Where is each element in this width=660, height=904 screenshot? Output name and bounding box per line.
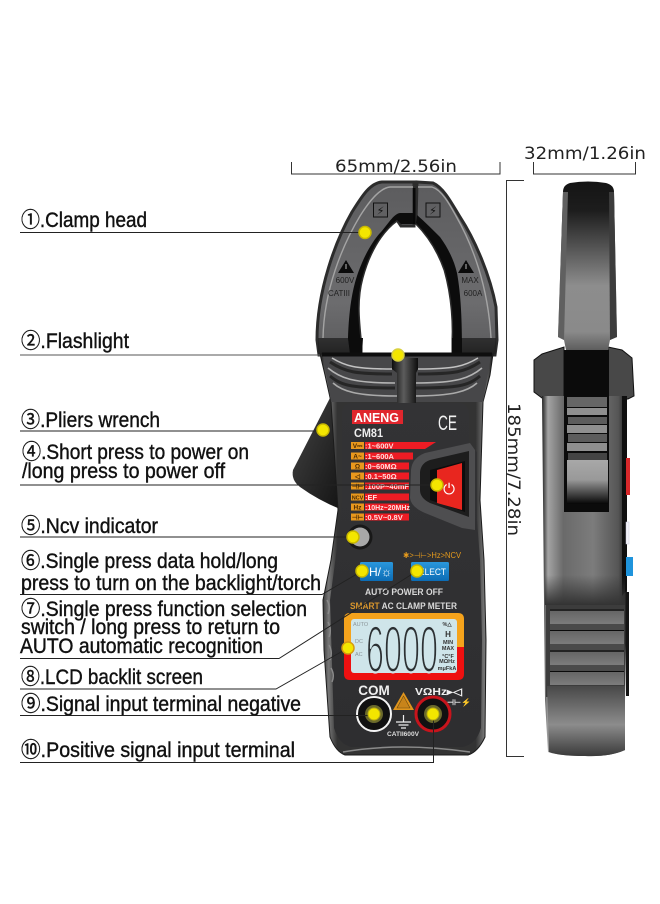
side head: [558, 182, 617, 390]
mode hint: ✱>⊣⊢>Hz>NCV: [403, 551, 462, 560]
LCD screen: DC: [355, 639, 363, 645]
button: hold: H/☼: [369, 565, 392, 579]
LCD screen: [344, 612, 464, 686]
dimension: clamp width: [292, 157, 500, 177]
side buttons: [626, 458, 633, 576]
spec table: A~: [353, 454, 362, 460]
front panel captions: AUTO POWER OFF: [365, 587, 443, 597]
spec table: [351, 442, 436, 522]
spec table: :0.1~50Ω: [365, 472, 397, 481]
logo: CM81: [354, 428, 384, 440]
callout 6: hold button: ⑥.Single press data hold/long: [21, 550, 278, 573]
spec table: :0.5V~0.8V: [365, 513, 403, 522]
callout 4: power button: [20, 441, 443, 491]
dimension: clamp width: 65mm/2.56in: [335, 157, 457, 177]
body edge and lip: [327, 600, 470, 752]
power button: ⏻: [443, 480, 455, 498]
callout 3: pliers wrench: [20, 409, 329, 436]
head warnings: MAX: [461, 276, 479, 285]
side grip: [545, 575, 629, 756]
callout 4: power button: ④.Short press to power on: [22, 441, 249, 464]
dimension: height: 185mm/7.28in: [503, 403, 523, 536]
spec table: :EF: [365, 493, 378, 502]
flashlight post: [392, 358, 418, 403]
spec table: Ω: [355, 464, 360, 470]
neck ridges: [322, 354, 492, 402]
dimension: depth: 32mm/1.26in: [524, 144, 646, 164]
LCD screen: %△: [442, 621, 452, 628]
callout 4: power button: /long press to power off: [22, 460, 225, 483]
dimension: height: [503, 180, 524, 756]
callout 5: NCV indicator: [20, 515, 359, 543]
side shoulder: [534, 347, 634, 399]
callout 7: select button: [20, 565, 423, 658]
V terminal: [415, 687, 471, 731]
spec table: ⊣⊢: [352, 514, 363, 522]
callout 10: positive terminal: ⑩.Positive signal input terminal: [21, 739, 295, 762]
button: select: ELECT: [419, 567, 446, 578]
callout 3: pliers wrench: ③.Pliers wrench: [21, 409, 160, 432]
meter front view: [293, 182, 497, 755]
LCD screen: AC: [355, 652, 363, 658]
spec table: ⊣⊢: [352, 482, 363, 490]
meter side view: [534, 182, 634, 756]
front panel captions: [350, 587, 457, 611]
V terminal: VΩHz▸◁: [415, 687, 462, 698]
spec table: :100P~40mF: [365, 482, 409, 491]
LCD screen: mμFkA: [438, 666, 456, 672]
spec table: NCV: [352, 496, 364, 502]
clamp head: [317, 182, 497, 355]
head warnings: CATIII: [328, 289, 350, 298]
spec table: :1~600A: [365, 452, 395, 461]
LCD screen: H: [445, 630, 451, 639]
callout 8: LCD: ⑧.LCD backlit screen: [21, 666, 203, 689]
meter body: [320, 354, 493, 755]
icon: lightning boxes: ⚡: [429, 204, 437, 218]
pliers lever: [293, 396, 340, 509]
side body: [542, 396, 627, 756]
spec table: :0~60MΩ: [365, 462, 397, 471]
LCD screen: MIN: [443, 640, 453, 646]
callout 2: flashlight: [20, 330, 404, 361]
callout 1: clamp head: ①.Clamp head: [21, 209, 147, 232]
V terminal: ⊣⊢⚡: [447, 697, 471, 707]
spec table: V⎓: [353, 443, 363, 450]
button: select: [411, 562, 449, 581]
logo: [352, 410, 403, 440]
callout 7: select button: AUTO automatic recognition: [20, 635, 263, 658]
front panel captions: SMART AC CLAMP METER: [350, 601, 457, 611]
side channel with ribs: [564, 350, 609, 512]
spec table: ◁: [354, 474, 361, 480]
warning and ground: CATII600V: [387, 731, 420, 738]
power button: [410, 443, 475, 530]
warning and ground: [387, 692, 420, 738]
CE mark: CE: [438, 412, 457, 435]
COM terminal: [357, 683, 391, 731]
callout 6: hold button: [20, 550, 368, 595]
NCV indicator: [348, 524, 372, 550]
callout 7: select button: switch / long press to return to: [21, 616, 280, 639]
face plate: [330, 403, 482, 747]
icon: lightning boxes: [374, 203, 440, 218]
dimension: depth: [524, 144, 646, 174]
LCD screen: MAX: [442, 646, 454, 652]
LCD screen: MΩHz: [439, 659, 455, 665]
LCD screen: °C°F: [442, 654, 455, 660]
COM terminal: COM: [358, 683, 390, 698]
spec table: Hz: [354, 504, 362, 512]
head warnings: 600V: [336, 276, 355, 285]
head warnings: 600A: [464, 289, 483, 298]
icon: lightning boxes: ⚡: [377, 204, 384, 218]
callout 6: hold button: press to turn on the backlight/torch: [21, 572, 321, 595]
callout 1: clamp head: [20, 209, 371, 238]
LCD screen: AUTO: [353, 622, 369, 628]
callout 8: LCD: [20, 642, 354, 689]
logo: ANENG: [354, 410, 399, 425]
head warnings: [328, 260, 483, 298]
callout 9: negative terminal: ⑨.Signal input terminal negative: [21, 693, 301, 716]
callout 7: select button: ⑦.Single press function selection: [21, 598, 307, 621]
callout 2: flashlight: ②.Flashlight: [21, 330, 129, 353]
callout 5: NCV indicator: ⑤.Ncv indicator: [21, 515, 158, 538]
button: hold: [360, 562, 393, 581]
callout 10: positive terminal: [20, 708, 439, 762]
spec table: :1~600V: [365, 442, 394, 450]
LCD screen: 6000: [366, 612, 438, 686]
spec table: :10Hz~20MHz: [365, 505, 410, 512]
